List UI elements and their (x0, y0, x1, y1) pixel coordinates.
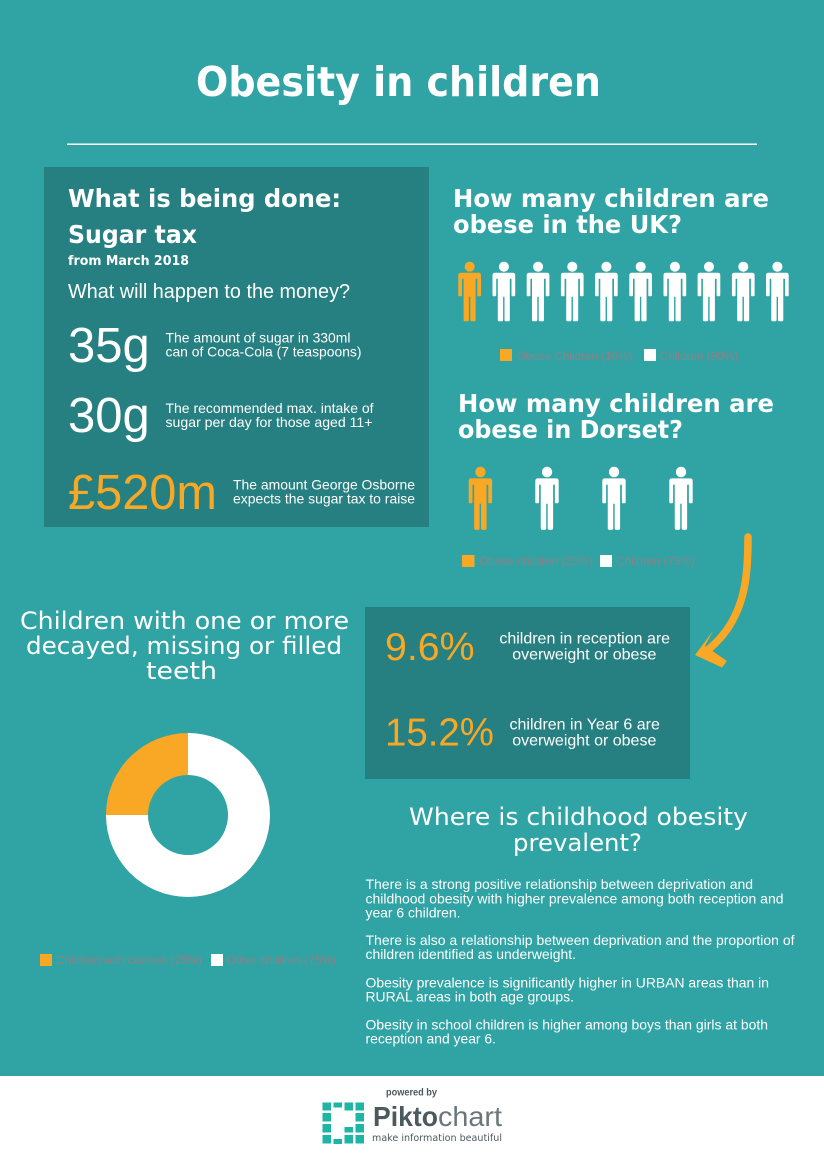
text: 520m description: The amount George Osborne (233, 476, 415, 492)
text: 30g description: The recommended max. intake of (166, 400, 374, 416)
text: prevalence paragraphs: year 6 children. (366, 904, 460, 920)
question: What will happen to the money? (68, 281, 350, 303)
text: prevalence paragraphs: Obesity in school children is higher among boys than girls at both (366, 1016, 768, 1032)
text: 520m description (233, 476, 415, 506)
text: prevalence paragraphs: Obesity prevalence is significantly higher in URBAN areas than in (366, 974, 769, 990)
text: Piktochart wordmark: Pikto (373, 1101, 438, 1132)
legend: teeth: Children with cavities (25%) (56, 953, 202, 967)
text: 30g description: sugar per day for those aged 11+ (166, 414, 372, 430)
text: reception: overweight or obese (512, 646, 656, 664)
text: prevalence paragraphs: children identified as underweight. (366, 946, 576, 962)
title: Obesity in children (196, 58, 601, 106)
text: 30g description (166, 400, 374, 430)
text: reception: children in reception are (499, 630, 670, 648)
text: 35g description (166, 330, 362, 360)
text: 520m description: expects the sugar tax to raise (233, 490, 415, 506)
heading: teeth: teeth (146, 657, 217, 685)
text: Piktochart wordmark (373, 1101, 502, 1132)
footer (0, 1076, 824, 1156)
heading: what is being done: What is being done: (68, 184, 341, 213)
text: prevalence paragraphs: RURAL areas in both age groups. (366, 988, 574, 1004)
stat: 520m: £520m (68, 466, 217, 520)
legend: Dorset: Children (75%) (616, 554, 695, 568)
heading: prevalence (409, 803, 748, 857)
text: year 6 (510, 716, 660, 750)
heading: teeth (20, 607, 349, 685)
text: Piktochart wordmark: chart (438, 1101, 502, 1132)
stat: 30g: 30g (68, 389, 150, 443)
text: prevalence paragraphs (366, 876, 795, 1046)
arrow (695, 537, 748, 668)
legend: Dorset (462, 554, 695, 568)
legend: teeth: Other children (75%) (227, 953, 336, 967)
heading: sugar tax: Sugar tax (68, 220, 197, 249)
subheading: from March 2018: from March 2018 (68, 254, 189, 269)
donut chart (106, 733, 270, 897)
panel: what is being done (44, 167, 429, 527)
heading: UK (453, 184, 769, 239)
heading: Dorset (458, 389, 774, 444)
heading: prevalence: Where is childhood obesity (409, 803, 748, 831)
legend: UK (500, 349, 738, 363)
pictogram: Dorset children (469, 467, 693, 530)
text: year 6: children in Year 6 are (510, 716, 660, 734)
heading: teeth: Children with one or more (20, 607, 349, 635)
stat: 35g: 35g (68, 319, 150, 373)
text: tagline: make information beautiful (372, 1133, 502, 1144)
text: prevalence paragraphs: There is also a relationship between deprivation and the proportion of (366, 932, 795, 948)
text: prevalence paragraphs: childhood obesity with higher prevalence among both reception and (366, 890, 784, 906)
legend: UK: Children (90%) (660, 349, 738, 363)
stat: 15.2%: 15.2% (385, 712, 494, 755)
text: 35g description: The amount of sugar in 330ml (166, 330, 350, 346)
text: powered by: powered by (386, 1088, 437, 1098)
panel: overweight stats (365, 607, 690, 779)
heading: UK: How many children are (453, 184, 769, 213)
text: 35g description: can of Coca-Cola (7 teaspoons) (166, 344, 362, 360)
text: prevalence paragraphs: There is a strong positive relationship between deprivation and (366, 876, 753, 892)
heading: prevalence: prevalent? (513, 829, 642, 857)
heading: Dorset: obese in Dorset? (458, 415, 683, 444)
heading: UK: obese in the UK? (453, 210, 682, 239)
pictogram: UK children (458, 262, 789, 321)
legend: teeth (40, 953, 336, 967)
legend: UK: Obese Children (10%) (516, 349, 632, 363)
text: reception (499, 630, 670, 664)
heading: teeth: decayed, missing or filled (26, 632, 342, 660)
text: prevalence paragraphs: reception and year 6. (366, 1030, 496, 1046)
heading: Dorset: How many children are (458, 389, 774, 418)
icon: Piktochart logo (322, 1102, 364, 1144)
text: year 6: overweight or obese (512, 732, 656, 750)
legend: Dorset: Obese children (25%) (479, 554, 593, 568)
stat: 9.6%: 9.6% (385, 626, 474, 669)
